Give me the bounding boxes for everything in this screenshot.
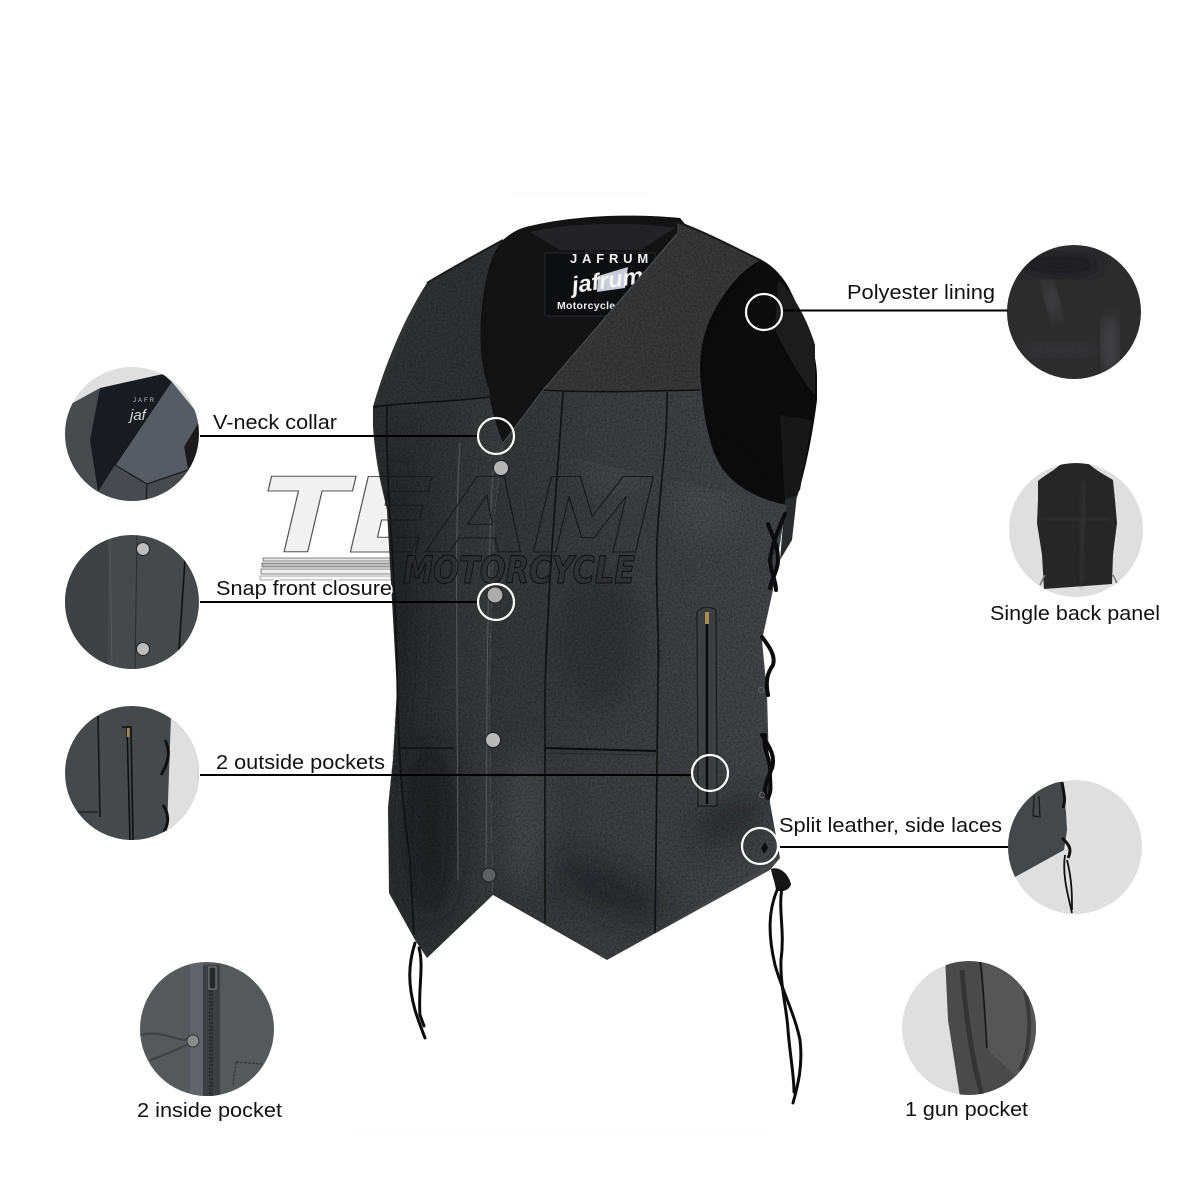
thumbnail: back of vest [1009, 463, 1143, 597]
thumbnail: V-neck collar: jaf [128, 407, 148, 424]
neck label [545, 251, 655, 316]
neck label: jafrum [567, 262, 645, 298]
armhole lining [680, 258, 817, 510]
target ring [746, 294, 782, 330]
label: Single back panel [990, 603, 1160, 625]
label: 2 inside pocket [137, 1100, 282, 1122]
callout: Single back panel [990, 460, 1160, 625]
target ring [692, 755, 728, 791]
thumbnail: snaps [65, 535, 199, 669]
label: Polyester lining [847, 282, 995, 304]
leader line [782, 310, 1008, 312]
thumbnail: gun pocket [902, 961, 1036, 1095]
thumbnail: outside pocket [65, 706, 199, 840]
thumbnail: side laces [1008, 780, 1142, 914]
leather shading [384, 400, 772, 933]
target ring [742, 828, 778, 864]
neck label: Motorcycle [557, 300, 615, 312]
leader line [200, 774, 692, 776]
left front panel [373, 240, 503, 958]
label: Snap front closure [216, 578, 392, 600]
thumbnail: inside pocket [138, 960, 278, 1100]
callout: 2 outside pockets [60, 700, 728, 845]
left lace tails [410, 943, 425, 1038]
side zip pocket [697, 607, 717, 806]
lining folds [530, 224, 675, 250]
label: 2 outside pockets [216, 752, 385, 774]
target ring [478, 584, 514, 620]
yoke shoulders [543, 222, 760, 390]
side laces [758, 514, 785, 854]
callout: V-neck collar [65, 367, 516, 501]
watermark outline over vest: MOTORCYCLE [403, 549, 635, 592]
label: V-neck collar [213, 412, 337, 434]
back strip by armhole [780, 495, 797, 560]
leather grain [373, 222, 787, 960]
leader line [200, 435, 478, 437]
neck label: JAFRUM [570, 251, 653, 266]
pocket openings [400, 747, 453, 749]
snap buttons [482, 460, 508, 882]
callout: Polyester lining [746, 243, 1143, 381]
thumbnail: V-neck collar [65, 367, 199, 501]
label: 1 gun pocket [905, 1099, 1028, 1121]
right lace tails [770, 868, 801, 1103]
vest seams [373, 222, 760, 935]
callout: Split leather, side laces [742, 778, 1145, 918]
vest back and neck lining [465, 216, 690, 445]
thumbnail: lining [1005, 243, 1143, 381]
label: Split leather, side laces [779, 815, 1002, 837]
watermark fill: TEAM logo: TEAM [262, 457, 656, 577]
leader line [200, 601, 478, 603]
right front panel [489, 222, 787, 960]
faint image edge marks [355, 193, 770, 1131]
lapel edges [503, 234, 677, 443]
callout: 1 gun pocket [900, 955, 1040, 1121]
leader line [780, 846, 1008, 848]
callout: Snap front closure [60, 530, 514, 675]
target ring [478, 418, 514, 454]
thumbnail: V-neck collar: JAFR [133, 398, 156, 404]
watermark outline over vest [379, 476, 654, 584]
callout: 2 inside pocket [137, 960, 282, 1122]
vest [373, 216, 817, 1103]
watermark outline over vest: TEAM [262, 457, 656, 577]
